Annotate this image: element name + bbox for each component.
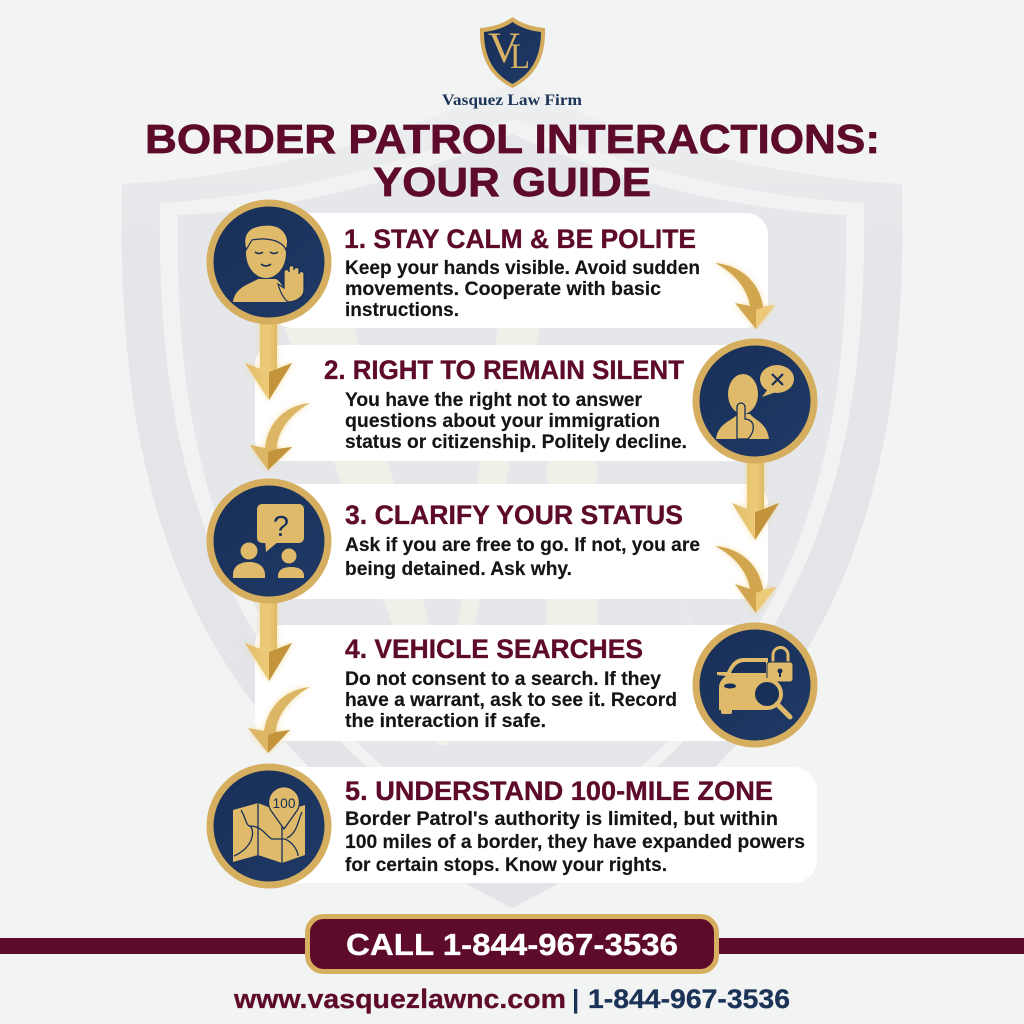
icon: question speech bubble with two people [210, 482, 328, 600]
text: step 3: being detained. Ask why. [345, 559, 572, 580]
footer contact: 1-844-967-3536 [588, 984, 790, 1014]
title [145, 116, 880, 205]
arrow: step 3 curved right [715, 546, 776, 613]
logo shield: L [510, 36, 530, 76]
logo shield: V [488, 25, 520, 72]
panel: step 5 [270, 767, 817, 883]
footer bar [0, 938, 1024, 954]
text: step 2 [345, 390, 687, 453]
footer contact [233, 984, 790, 1014]
text: step 1: instructions. [345, 300, 459, 321]
heading: step 1: 1. STAY CALM & BE POLITE [344, 224, 696, 254]
arrow: step 4 curved [248, 687, 310, 753]
arrow: step 1 straight [245, 318, 292, 400]
panel: step 3 [270, 484, 768, 599]
text: step 1: Keep your hands visible. Avoid sudden [345, 258, 700, 279]
text: step 2: You have the right not to answer [345, 390, 643, 411]
logo [442, 17, 583, 109]
arrow: step 3 straight [245, 597, 292, 681]
icon: car with lock and magnifier [696, 626, 814, 744]
icon: map with 100 pin [210, 767, 328, 885]
text: step 5 [345, 809, 805, 876]
heading: step 4: 4. VEHICLE SEARCHES [345, 634, 643, 664]
icon: calm person with raised hand [210, 203, 328, 321]
arrow: step 2 straight [732, 458, 779, 540]
heading: step 2: 2. RIGHT TO REMAIN SILENT [324, 355, 684, 385]
text: step 4: the interaction if safe. [345, 711, 546, 732]
panel: step 4 [255, 625, 755, 741]
watermark shield [122, 82, 902, 908]
text: step 2: questions about your immigration [345, 411, 660, 432]
icon: map with 100 pin: 100 [272, 795, 296, 811]
panel: step 2 [255, 345, 755, 461]
panel: step 1 [270, 213, 768, 328]
logo shield [480, 17, 545, 88]
text: step 2: status or citizenship. Politely decline. [345, 432, 687, 453]
icon: silent person [696, 342, 814, 460]
text: step 3 [345, 535, 700, 580]
arrow: step 2 curved right [715, 263, 775, 329]
text: step 5: for certain stops. Know your rights. [345, 855, 667, 876]
text: step 5: 100 miles of a border, they have expanded powers [345, 832, 805, 853]
text: step 1 [345, 258, 700, 321]
firm name: Vasquez Law Firm [442, 92, 583, 109]
text: step 4 [345, 669, 677, 732]
arrow: step 1 curved [250, 403, 310, 470]
text: step 4: have a warrant, ask to see it. Record [345, 690, 677, 711]
text: step 4: Do not consent to a search. If they [345, 669, 661, 690]
title: YOUR GUIDE [373, 159, 651, 205]
icon: question speech bubble with two people: ? [273, 511, 289, 543]
heading: step 3: 3. CLARIFY YOUR STATUS [345, 500, 683, 530]
footer contact: | [572, 984, 579, 1014]
footer contact: www.vasquezlawnc.com [233, 984, 566, 1014]
title: BORDER PATROL INTERACTIONS: [145, 116, 880, 162]
call button: CALL 1-844-967-3536 [346, 927, 678, 962]
text: step 5: Border Patrol's authority is limited, but within [345, 809, 778, 830]
heading: step 5: 5. UNDERSTAND 100-MILE ZONE [345, 776, 773, 806]
text: step 1: movements. Cooperate with basic [345, 279, 661, 300]
text: step 3: Ask if you are free to go. If not, you are [345, 535, 700, 556]
call button [308, 916, 716, 972]
